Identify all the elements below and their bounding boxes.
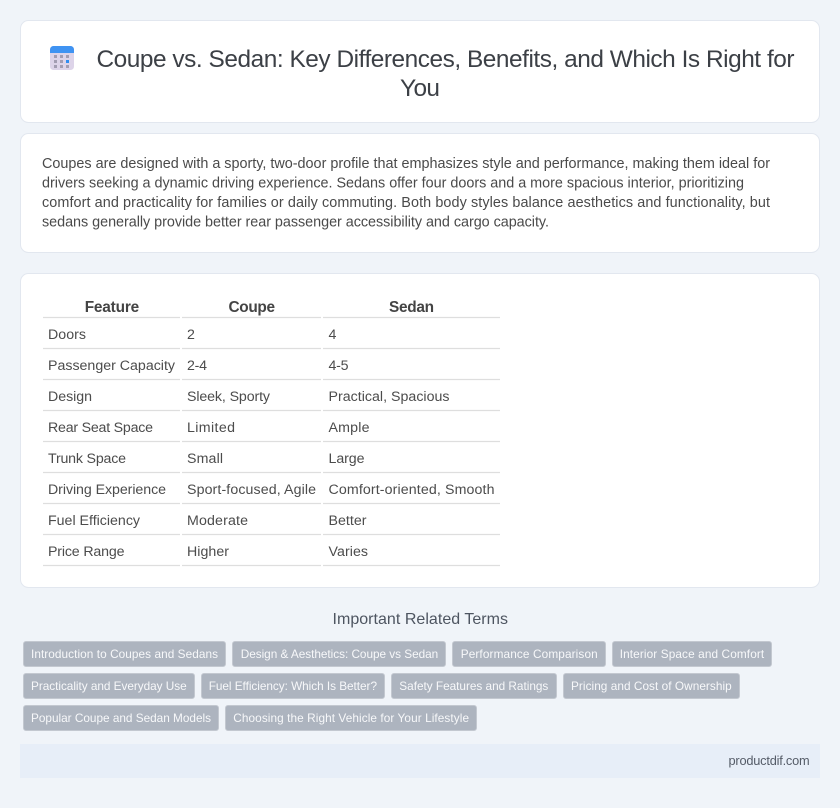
- tag: [24, 706, 218, 730]
- row: doors: 4: [328, 327, 336, 343]
- row: trunk space: Large: [328, 451, 365, 467]
- table header: Coupe: [228, 299, 275, 316]
- row: driving experience: Driving Experience: [48, 482, 166, 498]
- tag: [392, 674, 556, 698]
- title: Coupe vs. Sedan: Key Differences, Benefits, and Which Is Right for: [96, 46, 794, 73]
- text block: introduction: Coupes are designed with a sporty, two-door profile that emphasizes style and performance, making them ideal for: [42, 156, 770, 172]
- title: [96, 46, 794, 102]
- tag: Interior Space and Comfort: [620, 647, 765, 661]
- row: passenger capacity: 4-5: [328, 358, 349, 374]
- row: rear seat space: Rear Seat Space: [48, 420, 153, 436]
- row: driving experience: Comfort-oriented, Smooth: [328, 482, 494, 498]
- footer: productdif.com: [728, 753, 810, 768]
- tag: [564, 674, 740, 698]
- tag: Performance Comparison: [461, 647, 598, 661]
- text block: introduction: drivers seeking a dynamic driving experience. Sedans offer four doors and a more spacious interior, prioritizing: [42, 176, 744, 192]
- heading: important related terms: Important Related Terms: [332, 611, 508, 628]
- tag: [24, 674, 194, 698]
- row: passenger capacity: 2-4: [187, 358, 207, 374]
- row: rear seat space: Ample: [328, 420, 370, 436]
- tag: Practicality and Everyday Use: [31, 679, 187, 693]
- icon: calendar: [50, 46, 74, 70]
- row: driving experience: Sport-focused, Agile: [187, 482, 316, 498]
- row: fuel efficiency: Fuel Efficiency: [48, 513, 141, 529]
- text block: introduction: comfort and practicality for families or daily commuting. Both body styles balance aesthetics and functionality, but: [42, 195, 770, 211]
- footer: [20, 744, 820, 778]
- tag: Safety Features and Ratings: [399, 679, 548, 693]
- tag: [24, 642, 226, 666]
- row: rear seat space: [48, 420, 370, 436]
- row: price range: Price Range: [48, 544, 125, 560]
- table header: [85, 299, 434, 316]
- tag: Pricing and Cost of Ownership: [571, 679, 732, 693]
- row: design: Practical, Spacious: [328, 389, 450, 405]
- row: trunk space: Small: [187, 451, 223, 467]
- row: driving experience: [48, 482, 494, 498]
- tag: [232, 642, 446, 666]
- row: design: [48, 389, 450, 405]
- row: fuel efficiency: Better: [328, 513, 367, 529]
- row: trunk space: [48, 451, 365, 467]
- tag: Fuel Efficiency: Which Is Better?: [209, 679, 377, 693]
- tag: [226, 706, 476, 730]
- row: trunk space: Trunk Space: [48, 451, 126, 467]
- row: passenger capacity: Passenger Capacity: [48, 358, 176, 374]
- title: You: [400, 75, 440, 102]
- tag: Popular Coupe and Sedan Models: [31, 711, 211, 725]
- row: design: Sleek, Sporty: [187, 389, 271, 405]
- tag: Introduction to Coupes and Sedans: [31, 647, 218, 661]
- row: doors: [48, 327, 336, 343]
- tag list: related terms: [24, 642, 772, 730]
- panel: introduction: [20, 134, 820, 252]
- panel: comparison table: [20, 274, 820, 588]
- table header: Sedan: [389, 299, 434, 316]
- row: fuel efficiency: Moderate: [187, 513, 248, 529]
- table header: Feature: [85, 299, 140, 316]
- row: doors: Doors: [48, 327, 86, 343]
- tag: [612, 642, 772, 666]
- row: passenger capacity: [48, 358, 349, 374]
- tag: [452, 642, 606, 666]
- text block: introduction: sedans generally provide better rear passenger accessibility and cargo capacity.: [42, 214, 549, 230]
- row: price range: Varies: [328, 544, 368, 560]
- row: price range: [48, 544, 368, 560]
- row: price range: Higher: [187, 544, 229, 560]
- row: design: Design: [48, 389, 92, 405]
- row: rear seat space: Limited: [187, 420, 235, 436]
- row: fuel efficiency: [48, 513, 367, 529]
- tag: [202, 674, 384, 698]
- tag: Choosing the Right Vehicle for Your Lifestyle: [233, 711, 469, 725]
- row: doors: 2: [187, 327, 195, 343]
- panel: title header: [20, 20, 820, 122]
- text block: introduction: [42, 156, 770, 230]
- tag: Design & Aesthetics: Coupe vs Sedan: [241, 647, 438, 661]
